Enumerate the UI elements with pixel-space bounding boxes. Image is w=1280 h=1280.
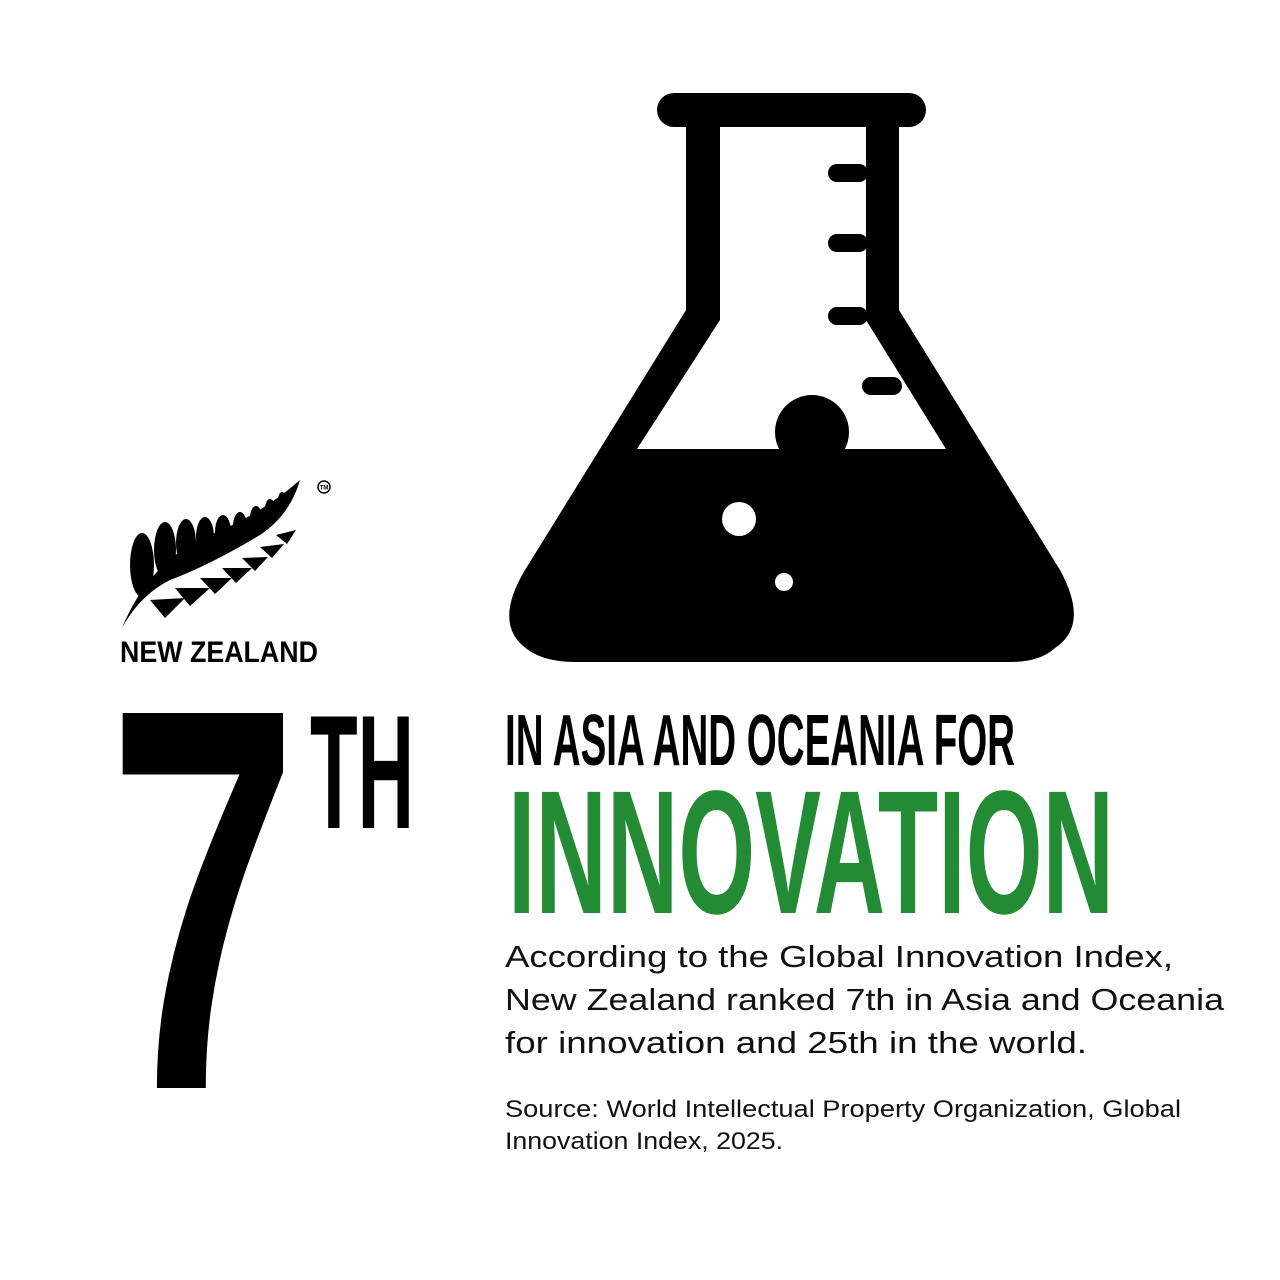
big number 7TH: 7 xyxy=(108,596,298,1204)
logo: New Zealand fern: NEW ZEALAND xyxy=(120,636,318,669)
body text: for innovation and 25th in the world. xyxy=(505,1025,1087,1060)
logo: New Zealand fern: TM xyxy=(320,486,328,492)
body text xyxy=(505,939,1225,1060)
body text: According to the Global Innovation Index, xyxy=(505,939,1173,974)
icon: flask xyxy=(509,93,1074,662)
heading xyxy=(505,701,1114,951)
logo: New Zealand fern xyxy=(120,480,330,669)
source: Source: World Intellectual Property Organization, Global xyxy=(505,1096,1181,1123)
text: TH xyxy=(310,682,414,863)
source xyxy=(505,1096,1181,1155)
source: Innovation Index, 2025. xyxy=(505,1128,783,1155)
body text: New Zealand ranked 7th in Asia and Oceania xyxy=(505,982,1225,1017)
